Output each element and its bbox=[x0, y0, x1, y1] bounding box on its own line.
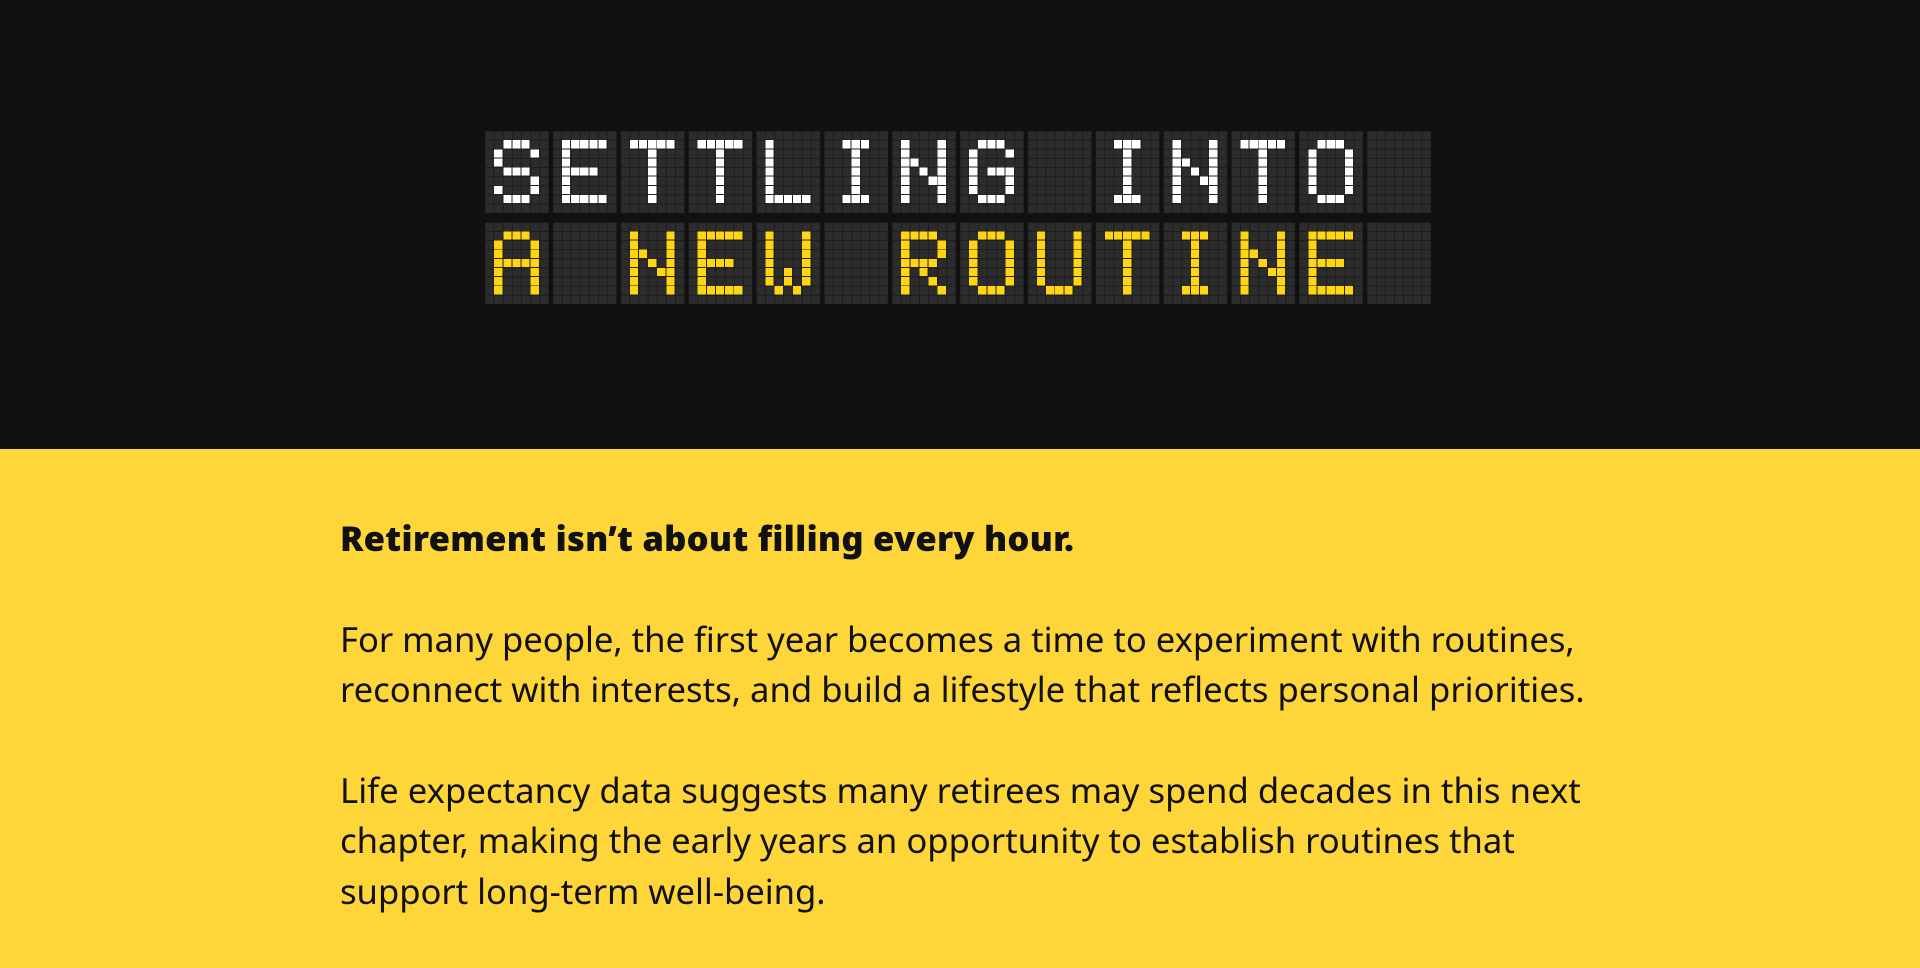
paragraph: life expectancy bbox=[340, 767, 1581, 915]
panel: dark header bbox=[0, 0, 1920, 449]
paragraph: first year: For many people, the first year becomes a time to experiment with routines, bbox=[340, 616, 1575, 663]
paragraph: life expectancy: support long-term well-being. bbox=[340, 868, 826, 915]
lead sentence: Retirement isn’t about filling every hour. bbox=[340, 515, 1074, 562]
paragraph: life expectancy: chapter, making the early years an opportunity to establish routines that bbox=[340, 817, 1515, 864]
paragraph: first year bbox=[340, 616, 1585, 713]
paragraph: life expectancy: Life expectancy data suggests many retirees may spend decades in this next bbox=[340, 767, 1581, 814]
body copy bbox=[340, 515, 1585, 915]
departure board title bbox=[485, 131, 1431, 304]
panel: yellow text section bbox=[0, 449, 1920, 968]
paragraph: first year: reconnect with interests, and build a lifestyle that reflects personal priorities. bbox=[340, 666, 1585, 713]
